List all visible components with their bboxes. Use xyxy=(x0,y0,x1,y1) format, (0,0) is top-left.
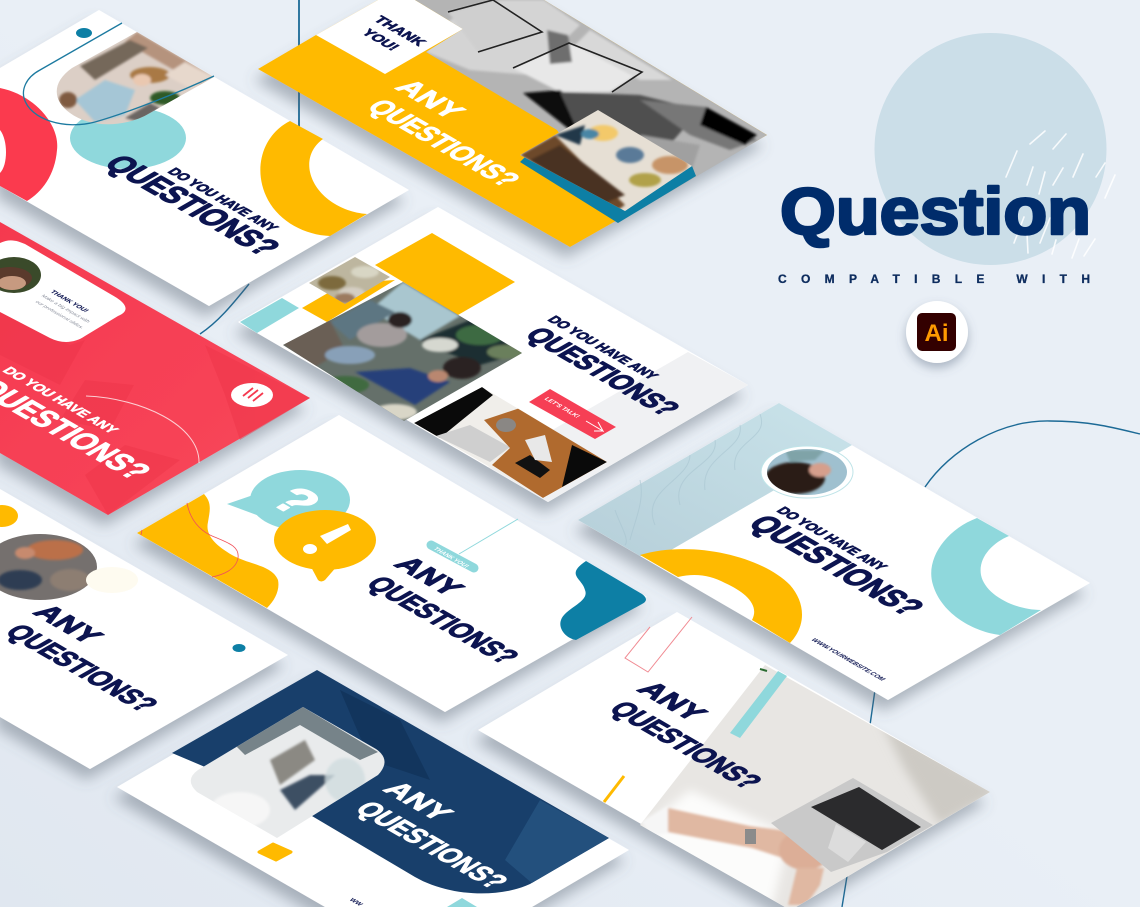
heading: ANY xyxy=(630,677,713,726)
white card xyxy=(0,240,126,342)
heading xyxy=(359,552,525,669)
slide: speech bubbles any questions xyxy=(137,415,647,712)
slide: navy any questions, bottom xyxy=(117,660,629,907)
avatar xyxy=(0,257,41,293)
slide: red questions xyxy=(0,222,310,515)
slide: laptop any questions, bottom right xyxy=(478,612,1000,907)
white thank you panel xyxy=(316,0,463,74)
teal ring xyxy=(931,518,1041,635)
heading: QUESTIONS? xyxy=(741,510,932,621)
heading xyxy=(360,75,526,192)
card text xyxy=(33,289,91,330)
small yellow block xyxy=(302,280,395,322)
yellow stripe xyxy=(604,776,624,802)
heading: QUESTIONS? xyxy=(359,572,525,669)
blue dot xyxy=(76,28,92,38)
slide: do you have any questions, top left xyxy=(0,10,409,306)
black and white photo xyxy=(410,0,780,230)
thin arc xyxy=(86,396,199,463)
website: WWW.YOURWEBSITE.COM xyxy=(809,637,887,682)
yellow square xyxy=(375,233,515,315)
card text: our professional slides. xyxy=(33,300,85,330)
title: Question xyxy=(780,174,1091,248)
small photo xyxy=(309,257,390,304)
pale blue wave panel xyxy=(578,403,852,556)
navy panel xyxy=(172,670,609,894)
teal strip xyxy=(730,671,787,738)
heading: ANY xyxy=(376,777,459,826)
card text: THANK YOU! xyxy=(48,289,90,314)
thank you text: THANK xyxy=(370,13,430,48)
curved line xyxy=(23,23,214,125)
blue dot xyxy=(232,644,246,652)
yellow blob xyxy=(137,494,278,608)
heading xyxy=(602,677,768,794)
heading: DO YOU HAVE ANY xyxy=(164,165,283,234)
blue blob xyxy=(560,561,646,640)
icon: adobe illustrator badge: Ai xyxy=(924,320,948,347)
slide: any questions, bottom left xyxy=(0,489,288,769)
grey panel xyxy=(488,352,748,502)
thank you pill: THANK YOU! xyxy=(431,546,470,569)
heading: QUESTIONS? xyxy=(602,697,768,794)
teal line xyxy=(459,519,518,554)
thank you text: YOU! xyxy=(358,26,403,53)
red outline xyxy=(625,617,692,672)
website fragment: WW xyxy=(347,897,365,907)
teal block xyxy=(240,298,299,333)
arm xyxy=(641,806,831,905)
heading: QUESTIONS? xyxy=(518,323,686,421)
laptop and desk photo xyxy=(410,385,610,500)
slide: teal do you have any questions xyxy=(578,403,1090,700)
heading: ANY xyxy=(388,75,471,124)
yellow ring xyxy=(640,549,802,643)
green tick xyxy=(760,669,767,671)
photo: office workers xyxy=(0,534,97,600)
photo: hands and laptop xyxy=(630,660,1000,907)
heading xyxy=(0,600,164,717)
thank you text xyxy=(358,13,430,53)
avatar xyxy=(761,446,853,498)
heading: QUESTIONS? xyxy=(348,797,514,894)
yellow tag xyxy=(259,844,291,860)
teal corner xyxy=(447,898,477,907)
photo: woman at laptop xyxy=(56,32,214,124)
teal question bubble xyxy=(227,470,350,530)
photo: handshake xyxy=(190,707,385,838)
heading: QUESTIONS? xyxy=(0,620,164,717)
card text: Make a big impact with xyxy=(39,294,91,324)
laptop xyxy=(771,778,933,872)
team photo xyxy=(520,110,692,211)
heading: DO YOU HAVE ANY xyxy=(0,364,123,436)
teal question bubble: ? xyxy=(258,479,333,523)
hatch marks xyxy=(1006,131,1115,258)
heading: QUESTIONS? xyxy=(360,95,526,192)
yellow ring xyxy=(260,121,367,236)
yellow exclamation bubble xyxy=(274,510,376,582)
teal circle xyxy=(70,107,186,169)
slide: any questions yellow, top xyxy=(258,0,780,247)
heading: DO YOU HAVE ANY xyxy=(544,313,663,382)
heading: QUESTIONS? xyxy=(97,150,288,261)
heading: ANY xyxy=(387,552,470,601)
slide: photos and questions, middle xyxy=(238,207,748,502)
building texture xyxy=(0,310,310,515)
yellow shape xyxy=(0,505,18,527)
decorative circle xyxy=(874,33,1106,265)
heading: DO YOU HAVE ANY xyxy=(773,504,892,573)
subtitle: COMPATIBLE WITH xyxy=(778,272,1090,286)
dot pattern xyxy=(86,567,138,593)
icon: adobe illustrator badge xyxy=(906,301,968,363)
heading: ANY xyxy=(26,600,109,649)
let's talk button xyxy=(529,389,616,439)
red ring xyxy=(0,88,57,201)
blue band xyxy=(520,155,696,223)
heading xyxy=(348,777,514,894)
let's talk button: LET'S TALK! xyxy=(542,396,581,419)
menu icon xyxy=(231,383,273,407)
large photo xyxy=(280,280,525,425)
